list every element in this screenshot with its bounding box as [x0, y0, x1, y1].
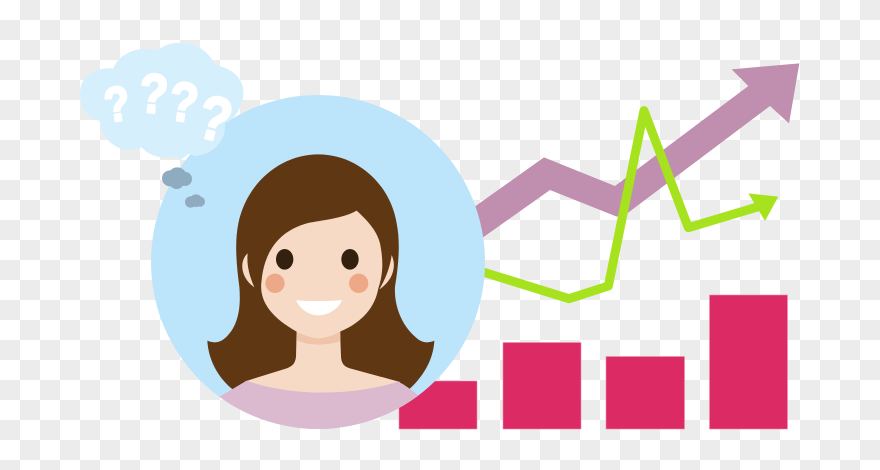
green line arrow — [470, 111, 778, 299]
left ear — [242, 253, 254, 287]
bar chart — [399, 295, 788, 429]
left eye — [276, 249, 293, 270]
question marks — [101, 62, 239, 157]
smile — [296, 300, 342, 315]
woman portrait — [207, 154, 434, 440]
neck and shoulders — [245, 330, 400, 400]
face — [261, 211, 382, 338]
neck shadow — [297, 332, 340, 345]
question mark 1: ? — [101, 75, 133, 133]
large thought puff — [162, 167, 192, 189]
bar 3 — [606, 356, 684, 429]
shirt — [220, 380, 418, 429]
thought cloud — [80, 43, 243, 208]
portrait circle — [151, 95, 485, 429]
bar 4 — [710, 295, 788, 429]
purple rising arrow — [470, 63, 799, 247]
right ear — [379, 255, 394, 289]
question mark 4: ? — [191, 82, 239, 157]
right cheek — [349, 274, 368, 293]
right eye — [341, 249, 359, 270]
hair — [207, 154, 434, 390]
question mark 3: ? — [165, 70, 202, 135]
question mark 2: ? — [137, 62, 171, 126]
left cheek — [265, 274, 285, 293]
bar 1 — [399, 381, 477, 429]
small thought puff — [185, 194, 205, 208]
cloud shape — [80, 43, 243, 161]
bar 2 — [503, 342, 581, 429]
